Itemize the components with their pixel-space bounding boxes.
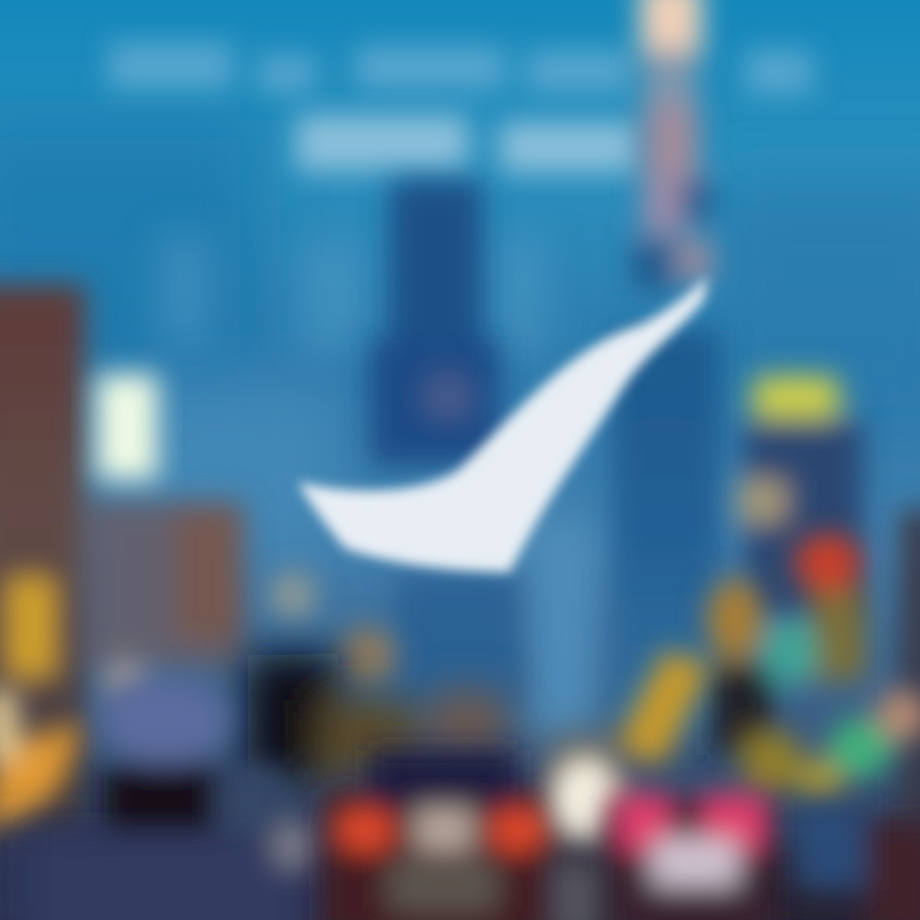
street lights and bokeh [269, 533, 920, 798]
central dark tower [370, 180, 520, 710]
right building with yellow sign [738, 376, 920, 830]
right car rear view in pink [605, 793, 775, 920]
title: blurred heading, first line [108, 42, 813, 94]
bright streetlight between cars [551, 756, 619, 840]
center car rear view [322, 750, 554, 920]
right tower with striped mast [612, 0, 720, 730]
faint distant buildings [160, 235, 545, 355]
far right vehicles [550, 805, 920, 920]
left foreground lights [0, 658, 147, 835]
bright white-green street sign [96, 374, 158, 480]
white check-shaped swoosh [298, 275, 708, 572]
lower sky column [525, 520, 600, 740]
title: blurred heading, second line [296, 115, 638, 172]
left brown building [0, 285, 245, 920]
foreground pedestrian with cap [30, 676, 319, 920]
yellow diagonal sign [612, 650, 712, 765]
dark street and crowd [0, 655, 920, 920]
sky tone variation [0, 120, 920, 540]
